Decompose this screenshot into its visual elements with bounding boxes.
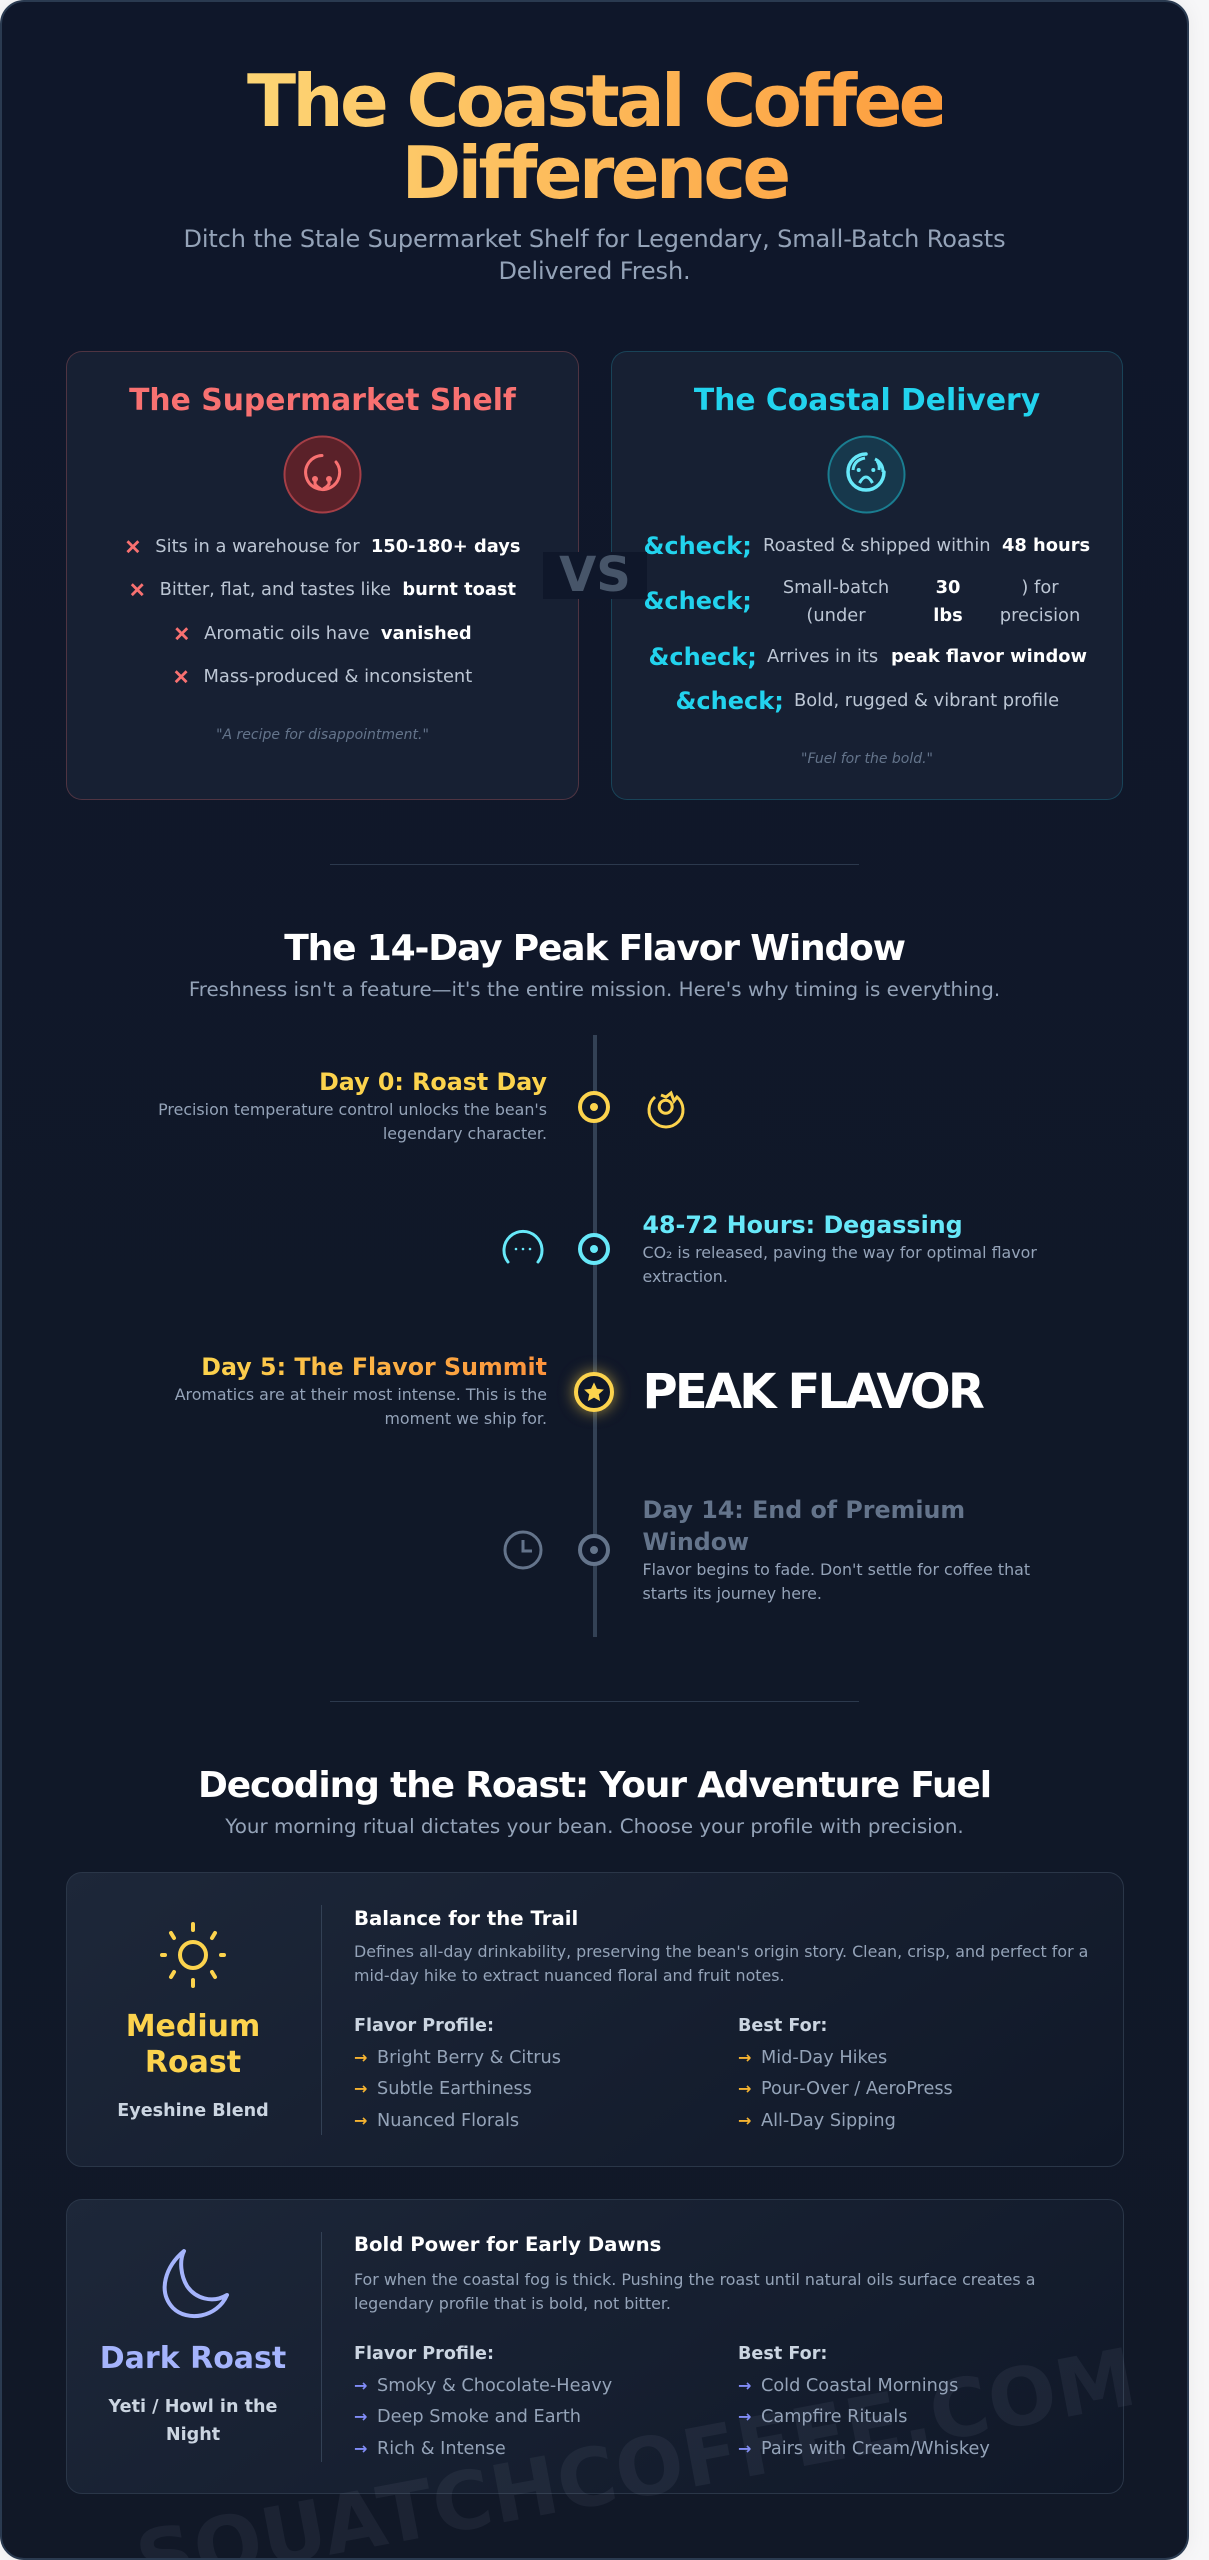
flavor profile: →	[354, 2111, 367, 2130]
flavor profile: Deep Smoke and Earth	[377, 2407, 581, 2427]
title: Difference	[401, 131, 788, 215]
panel: coastal delivery: Arrives in its	[767, 646, 878, 667]
list item	[173, 622, 472, 646]
best for: Pour-Over / AeroPress	[761, 2079, 953, 2099]
day 14 text	[642, 1560, 1030, 1603]
best for: →	[738, 2079, 751, 2098]
title: The Coastal Coffee	[247, 59, 944, 143]
card description	[354, 1942, 1088, 1985]
card: dark roast	[66, 2199, 1124, 2494]
icon: roast flame	[648, 1090, 684, 1128]
flavor profile: Smoky & Chocolate-Heavy	[377, 2376, 612, 2396]
panel: coastal delivery: &check;	[648, 643, 757, 671]
flavor profile: →	[354, 2439, 367, 2458]
card heading: Balance for the Trail	[354, 1907, 578, 1930]
summit node	[574, 1372, 614, 1412]
day 14 text: Flavor begins to fade. Don't settle for coffee that	[642, 1560, 1030, 1579]
card: medium roast	[66, 1872, 1124, 2167]
flavor profile: →	[354, 2048, 367, 2067]
icon: clock	[504, 1530, 542, 1570]
panel: coastal delivery: &check;	[676, 687, 784, 715]
panel: coastal delivery: 30	[936, 577, 960, 598]
panel: coastal delivery: (under	[806, 605, 866, 626]
roast name	[126, 2009, 260, 2080]
best for: →	[738, 2111, 751, 2130]
degassing text	[642, 1243, 1037, 1286]
list item: ✕	[129, 578, 146, 602]
heading: supermarket shelf: The Supermarket Shelf	[129, 383, 516, 418]
panel: coastal delivery: precision	[1000, 605, 1080, 626]
panel: coastal delivery: Bold, rugged & vibrant profile	[794, 690, 1059, 711]
heading: coastal delivery: The Coastal Delivery	[694, 383, 1040, 418]
blend name	[108, 2397, 277, 2445]
best for: Best For:	[738, 2344, 827, 2364]
check item	[676, 687, 1059, 715]
day 0 node	[578, 1091, 610, 1123]
icon: stale bean	[284, 436, 362, 514]
best for	[738, 2344, 990, 2459]
degassing title: 48-72 Hours: Degassing	[642, 1211, 963, 1239]
timeline: day 0	[158, 1068, 684, 1143]
flavor profile: →	[354, 2079, 367, 2098]
best for: Cold Coastal Mornings	[761, 2376, 958, 2396]
roast name: Medium	[126, 2009, 260, 2044]
best for: →	[738, 2407, 751, 2426]
best for: Mid-Day Hikes	[761, 2048, 887, 2068]
flavor profile: Rich & Intense	[377, 2439, 506, 2459]
vs badge: VS	[559, 547, 631, 603]
check item	[644, 577, 1080, 626]
summit text: Aromatics are at their most intense. This is the	[175, 1385, 547, 1404]
card description: Defines all-day drinkability, preserving the bean's origin story. Clean, crisp, and perfect for a	[354, 1942, 1088, 1961]
vs badge	[543, 552, 647, 599]
list item: vanished	[381, 623, 472, 644]
list item: ✕	[173, 665, 190, 689]
blend name: Yeti / Howl in the	[109, 2397, 277, 2417]
day 0 text: Precision temperature control unlocks the bean's	[158, 1100, 547, 1119]
blend name: Eyeshine Blend	[117, 2101, 269, 2121]
check item	[644, 532, 1090, 560]
check item	[648, 643, 1087, 671]
best for: →	[738, 2376, 751, 2395]
section subtitle: Your morning ritual dictates your bean. Choose your profile with precision.	[225, 1815, 964, 1838]
panel: coastal delivery	[611, 351, 1123, 800]
panel: coastal delivery: 48 hours	[1002, 535, 1090, 556]
card description	[354, 2270, 1035, 2313]
day 14 title: Window	[642, 1528, 749, 1556]
panel: coastal delivery: lbs	[933, 605, 963, 626]
list item: Aromatic oils have	[204, 623, 370, 644]
flavor profile: Nuanced Florals	[377, 2111, 519, 2131]
panel: coastal delivery: &check;	[644, 587, 752, 615]
flavor profile: Subtle Earthiness	[377, 2079, 532, 2099]
flavor profile	[354, 2344, 612, 2459]
summit text	[174, 1385, 547, 1428]
flavor profile: Bright Berry & Citrus	[377, 2048, 561, 2068]
degassing node	[578, 1233, 610, 1265]
list item: Mass-produced & inconsistent	[204, 666, 472, 687]
panel: coastal delivery: Small-batch	[783, 577, 889, 598]
day 0 title: Day 0: Roast Day	[319, 1068, 547, 1096]
best for	[738, 2016, 953, 2131]
panel: coastal delivery: ) for	[1021, 577, 1059, 598]
day 14 text: starts its journey here.	[642, 1584, 822, 1603]
flavor profile	[354, 2016, 561, 2131]
list item: Sits in a warehouse for	[155, 536, 360, 557]
panel: coastal delivery: &check;	[644, 532, 752, 560]
icon: sun	[160, 1922, 226, 1988]
card description: legendary profile that is bold, not bitter.	[354, 2294, 671, 2313]
best for: All-Day Sipping	[761, 2111, 896, 2131]
timeline: degassing	[502, 1211, 1037, 1286]
summit title: Day 5: The Flavor Summit	[201, 1353, 547, 1381]
list item: 150-180+ days	[371, 536, 520, 557]
degassing text: CO₂ is released, paving the way for optimal flavor	[642, 1243, 1037, 1262]
peak flavor label: PEAK FLAVOR	[642, 1364, 982, 1420]
day 14 node	[578, 1534, 610, 1566]
flavor profile: →	[354, 2376, 367, 2395]
best for: →	[738, 2048, 751, 2067]
card description: mid-day hike to extract nuanced floral and fruit notes.	[354, 1966, 785, 1985]
list item: ✕	[125, 535, 141, 559]
day 0 text	[158, 1100, 547, 1143]
card description: For when the coastal fog is thick. Pushing the roast until natural oils surface creates a	[354, 2270, 1035, 2289]
degassing text: extraction.	[642, 1267, 728, 1286]
best for: →	[738, 2439, 751, 2458]
list item	[125, 535, 520, 559]
title	[247, 65, 942, 209]
list item: Bitter, flat, and tastes like	[160, 579, 391, 600]
heading: peak flavor window: The 14-Day Peak Flavor Window	[284, 928, 905, 969]
flavor profile: →	[354, 2407, 367, 2426]
day 0 text: legendary character.	[383, 1124, 547, 1143]
icon: fresh bean	[828, 436, 906, 514]
panel: supermarket shelf	[66, 351, 579, 800]
summit text: moment we ship for.	[384, 1409, 547, 1428]
icon: moon	[162, 2249, 230, 2318]
timeline: day 14	[504, 1496, 1030, 1603]
card heading: Bold Power for Early Dawns	[354, 2233, 661, 2256]
panel: coastal delivery: peak flavor window	[891, 646, 1087, 667]
list item: burnt toast	[402, 579, 516, 600]
subtitle	[184, 225, 1005, 285]
timeline: flavor summit	[174, 1353, 984, 1428]
subtitle: Delivered Fresh.	[498, 257, 691, 285]
best for: Best For:	[738, 2016, 827, 2036]
best for: Campfire Rituals	[761, 2407, 908, 2427]
roast name: Dark Roast	[100, 2341, 286, 2376]
best for: Pairs with Cream/Whiskey	[761, 2439, 990, 2459]
roast name: Roast	[145, 2045, 241, 2080]
subtitle: Ditch the Stale Supermarket Shelf for Legendary, Small-Batch Roasts	[184, 225, 1005, 253]
flavor profile: Flavor Profile:	[354, 2016, 494, 2036]
list item: ✕	[173, 622, 190, 646]
quote: "Fuel for the bold."	[801, 751, 933, 767]
icon: gas bubble	[502, 1230, 544, 1264]
section subtitle: Freshness isn't a feature—it's the entire mission. Here's why timing is everything.	[189, 978, 1000, 1001]
list item	[129, 578, 516, 602]
flavor profile: Flavor Profile:	[354, 2344, 494, 2364]
timeline axis	[593, 1035, 597, 1637]
heading: decoding the roast: Decoding the Roast: Your Adventure Fuel	[198, 1765, 991, 1806]
quote: "A recipe for disappointment."	[216, 727, 429, 743]
panel: coastal delivery: Roasted & shipped within	[763, 535, 991, 556]
day 14 title	[642, 1496, 965, 1556]
blend name: Night	[166, 2425, 220, 2445]
day 14 title: Day 14: End of Premium	[642, 1496, 965, 1524]
